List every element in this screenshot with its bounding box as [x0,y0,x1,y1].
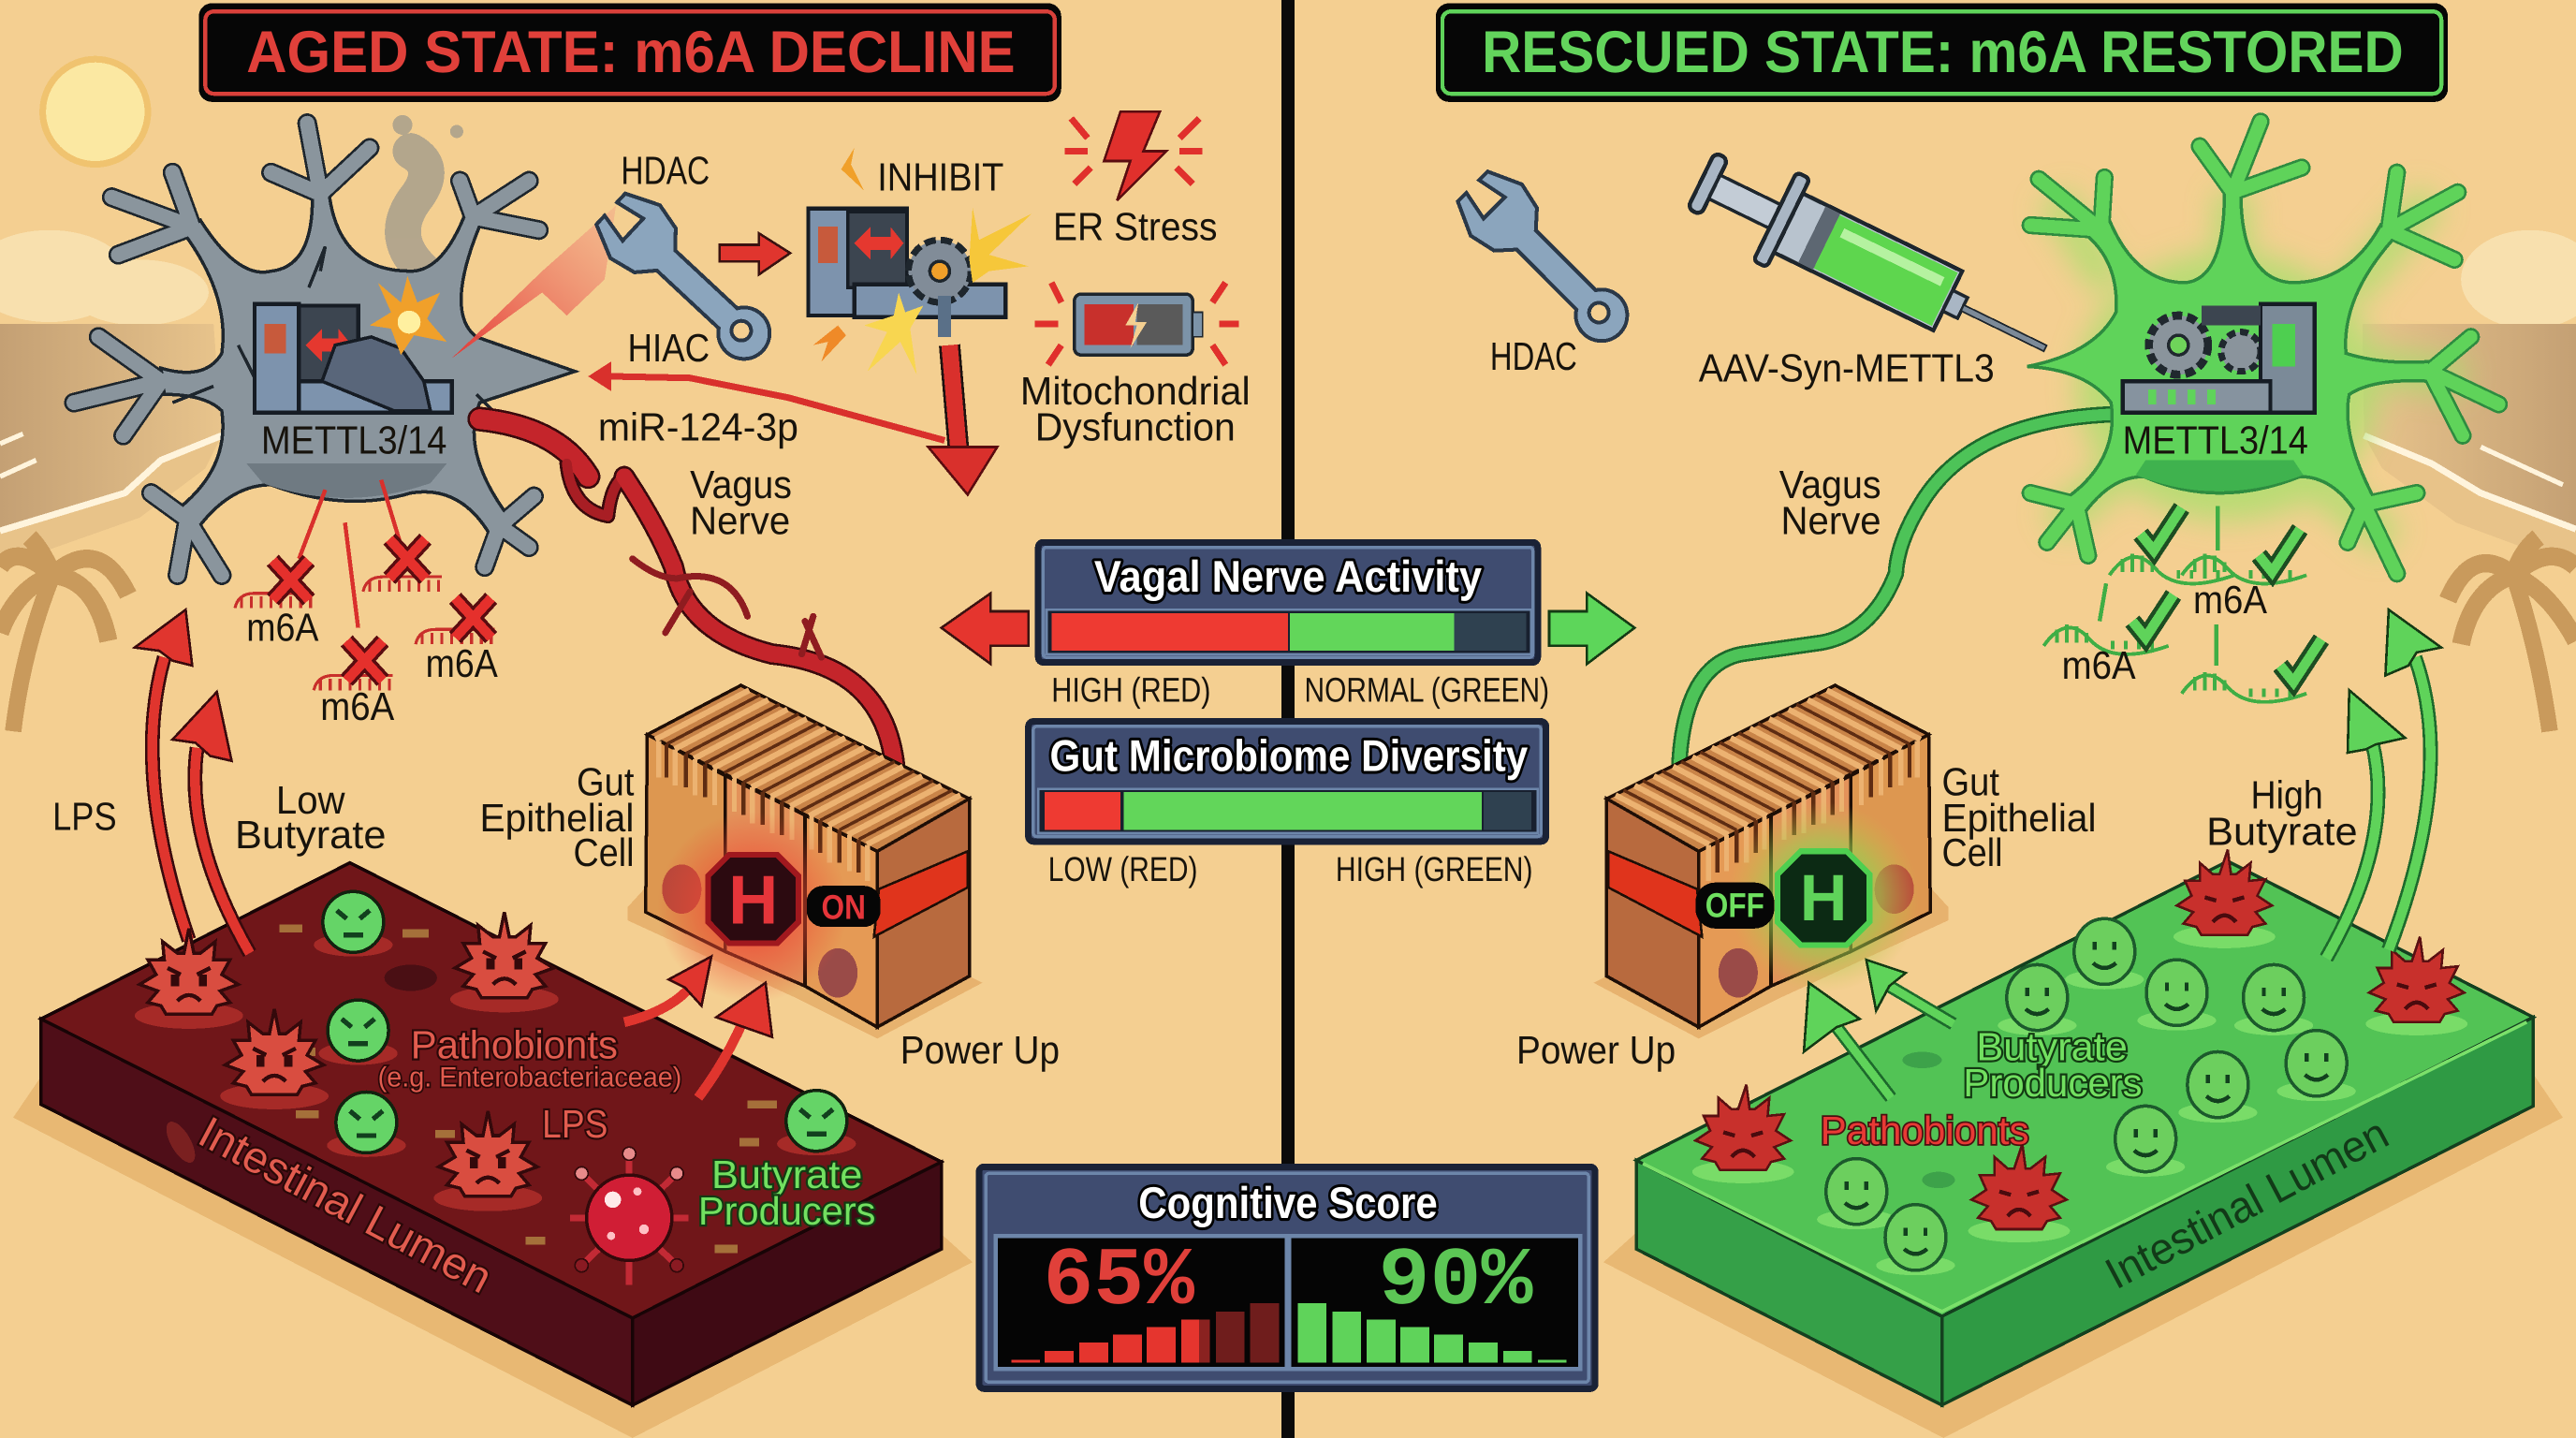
label: Pathobionts aged: Pathobionts [411,1024,618,1068]
arrow: green high butyrate inner [2326,690,2405,958]
label: Gut Epithelial Cell aged: Gut [577,761,635,805]
label: Gut Epithelial Cell aged [479,761,635,876]
label: NORMAL (GREEN): NORMAL (GREEN) [1305,672,1549,710]
label: Vagus Nerve aged: Nerve [690,500,790,544]
panel title: Gut Microbiome Diversity [1050,731,1528,781]
label: Gut Epithelial Cell rescued: Epithelial [1942,797,2097,842]
bars: aged declining [1011,1303,1279,1362]
intestinal lumen: rescued [1636,861,2533,1405]
label: AAV-Syn-METTL3: AAV-Syn-METTL3 [1699,346,1995,391]
label: Low Butyrate: Butyrate [235,814,386,858]
neuron glow [2054,192,2465,542]
label: METTL3/14 rescued: METTL3/14 [2123,419,2308,463]
label: Gut Epithelial Cell rescued: Gut [1942,761,1999,805]
label: HIGH (GREEN): HIGH (GREEN) [1336,851,1533,889]
icon: virus [570,1147,688,1285]
label: Butyrate Producers aged: Producers [698,1190,875,1234]
intestinal lumen: aged [41,863,942,1405]
gut cell: aged [627,685,983,1038]
label: Intestinal Lumen aged: Intestinal Lumen [191,1108,500,1303]
bars: rescued [1298,1303,1566,1362]
label: High Butyrate [2206,774,2358,855]
arrow: large red down [929,345,997,494]
label: miR-124-3p: miR-124-3p [598,406,798,450]
panel: Vagal Nerve Activity [1038,542,1538,662]
label: Gut Epithelial Cell aged: Epithelial [479,797,634,842]
bacteria: aged pathobionts [135,912,559,1211]
label: Gut Epithelial Cell rescued [1942,761,2097,876]
title: aged state: AGED STATE: m6A DECLINE [246,18,1016,85]
arrow: red into gut cell 1 [624,957,711,1022]
icon: restored machine [2123,304,2315,413]
panel: Gut Microbiome Diversity [1029,722,1546,842]
badge: OFF: OFF [1705,888,1764,925]
arrow: right green [1549,594,1634,664]
label: Low Butyrate [235,779,386,858]
label: Gut Epithelial Cell rescued: Cell [1942,831,2002,876]
icon: syringe [1679,136,2067,392]
panel: Cognitive Score [979,1167,1595,1388]
label: INHIBIT: INHIBIT [877,156,1004,200]
red lightning wedge [452,205,616,359]
label: Mitochondrial Dysfunction: Dysfunction [1035,406,1236,450]
label: Butyrate Producers aged: Butyrate [711,1153,862,1198]
arrow: wrench to machine [720,233,790,274]
label: METTL3/14 aged: METTL3/14 [261,419,446,463]
gut cell: rescued [1593,685,1949,1038]
arrow: green high butyrate outer [2385,609,2441,950]
label: HDAC rescued: HDAC [1490,335,1577,380]
center divider [1281,0,1295,1438]
beach scene: right [2363,230,2576,731]
icon: inhibited machine [809,207,1032,374]
badge: ON: ON [822,889,866,927]
m6A marks: aged [235,480,498,729]
label: Pathobionts rescued: Pathobionts [1821,1109,2029,1153]
badge: H rescued [1778,851,1869,945]
label: HDAC aged: HDAC [621,150,710,194]
label: Gut Epithelial Cell aged: Cell [574,831,634,876]
label: Vagus Nerve rescued: Vagus [1779,463,1881,507]
ground shadow: left lumen [13,1077,973,1438]
arrow: green into gut cell 2 [1866,960,1954,1024]
panel title: Cognitive Score [1138,1179,1438,1227]
label: Intestinal Lumen rescued: Intestinal Lumen [2098,1108,2396,1299]
title: rescued state [1438,5,2446,100]
nerve: rescued [1679,414,2116,772]
label: LOW (RED): LOW (RED) [1048,851,1197,889]
label: Low Butyrate: Low [276,779,346,823]
ground shadow: right lumen [1603,1077,2563,1438]
title: aged state [200,5,1060,100]
bar [1046,609,1531,654]
icon: wrench aged [586,183,787,377]
label: HIGH (RED) vagal: HIGH (RED) [1051,672,1211,710]
neuron: rescued green [2027,122,2499,574]
label: LPS in lumen: LPS [542,1103,607,1147]
neuron: aged grey [74,124,575,575]
title: rescued state: RESCUED STATE: m6A RESTORED [1482,18,2404,85]
label: Power Up aged: Power Up [900,1029,1060,1073]
badge: H aged [708,855,798,944]
vagus nerve: aged [479,419,896,772]
bacteria: rescued pathobionts [1692,850,2467,1242]
score: 90%: 90% [1379,1236,1534,1329]
icon: wrench rescued [1447,161,1646,360]
label: Butyrate Producers rescued: Butyrate [1976,1025,2128,1070]
bacteria: rescued green [1817,918,2356,1275]
arrow: left red [942,594,1029,664]
arrow: green into gut cell 1 [1804,983,1891,1098]
label: Butyrate Producers rescued [1963,1025,2143,1106]
icon: ER stress bolt [1064,111,1203,200]
arrow: red into gut cell 2 [698,983,772,1098]
label: Butyrate Producers rescued: Producers [1963,1062,2143,1106]
bacteria: aged green [314,891,856,1157]
label: High Butyrate: High [2250,774,2323,818]
bar [1038,789,1538,833]
badge: ON [807,886,881,927]
icon: flash [842,148,864,191]
icon: smoke [392,115,463,271]
label: Butyrate Producers aged [698,1153,875,1234]
label: Power Up rescued: Power Up [1516,1029,1676,1073]
label: Pathobionts aged [378,1024,681,1093]
label: Mitochondrial Dysfunction [1020,370,1251,450]
m6A marks: rescued: m6A [2062,644,2136,689]
label: Vagus Nerve rescued: Nerve [1781,500,1881,544]
arrow: low butyrate up [172,692,250,953]
icon: sun [43,59,148,165]
label: ER Stress: ER Stress [1053,205,1218,250]
m6A marks: aged: m6A [426,642,498,687]
m6A marks: rescued [2043,506,2321,702]
icon: battery [1035,283,1238,365]
label: Vagus Nerve aged: Vagus [690,463,792,507]
arrow: HIAC miR-124-3p inhibition [588,361,944,440]
m6A marks: aged: m6A [246,607,318,651]
arrow: LPS up [135,609,192,940]
badge: H rescued: H [1800,863,1848,935]
score: 65%: 65% [1043,1236,1196,1329]
m6A marks: aged: m6A [320,685,394,729]
badge: H aged: H [728,861,778,938]
screen [996,1236,1580,1369]
label: Vagus Nerve rescued [1779,463,1881,544]
icon: broken machine [255,276,452,413]
m6A marks: rescued: m6A [2193,579,2267,623]
label: LPS: LPS [52,796,117,840]
label: Vagus Nerve aged [690,463,792,544]
label: Mitochondrial Dysfunction: Mitochondrial [1020,370,1251,414]
label: HIAC: HIAC [627,327,710,372]
beach scene: left [0,230,222,731]
label: High Butyrate: Butyrate [2206,810,2358,855]
label: Pathobionts aged: (e.g. Enterobacteriaceae) [378,1062,681,1093]
panel title: Vagal Nerve Activity [1094,552,1482,601]
